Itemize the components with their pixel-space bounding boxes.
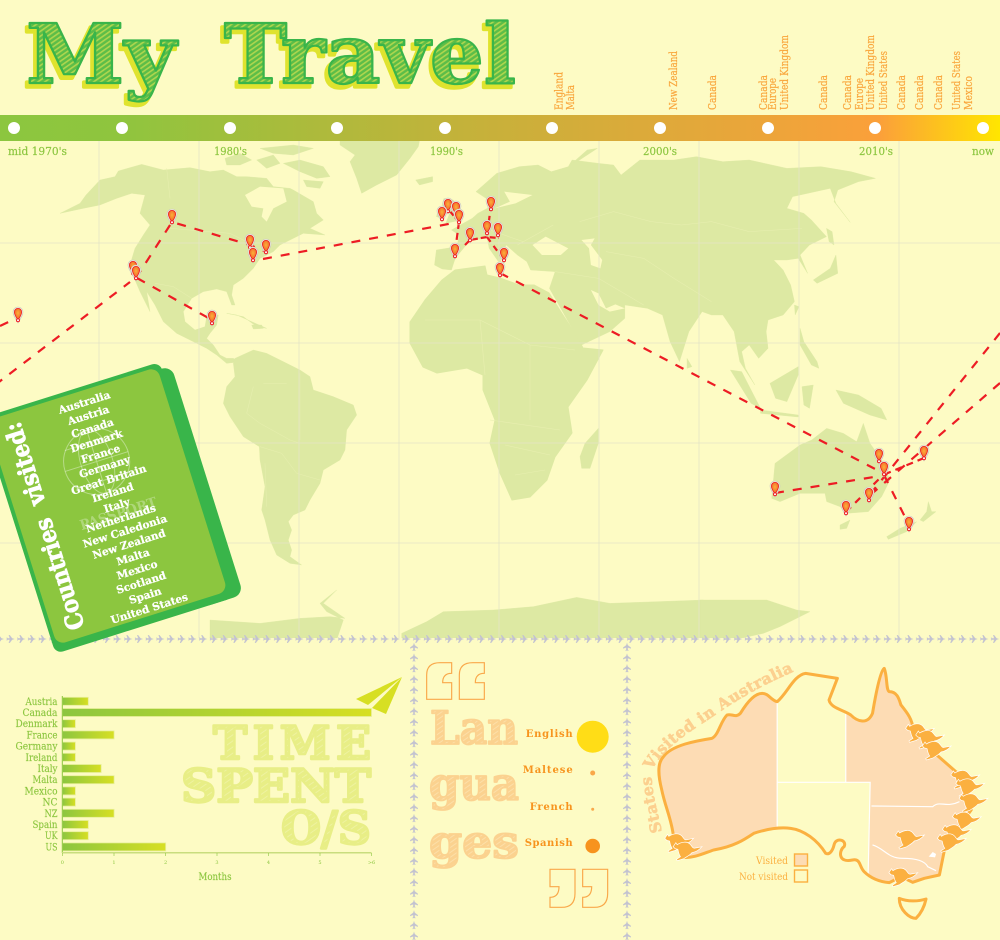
timeline destination labels: Europe xyxy=(766,78,779,110)
countries list xyxy=(41,384,193,628)
bar chart: Austria xyxy=(25,696,57,708)
timeline destination labels: Canada xyxy=(817,75,830,110)
timeline destination labels: Malta xyxy=(564,85,577,110)
countries list: New Zealand xyxy=(91,527,168,562)
opening quote marks xyxy=(427,663,484,699)
timeline destination labels: United States xyxy=(877,51,890,110)
timeline destination labels: Canada xyxy=(913,75,926,110)
language labels: Maltese xyxy=(523,765,573,776)
map pins xyxy=(13,196,929,532)
title: My xyxy=(26,7,179,103)
countries list: Germany xyxy=(78,453,133,481)
countries list: New Caledonia xyxy=(81,513,169,551)
countries list: Malta xyxy=(115,547,151,568)
language labels: French xyxy=(530,802,573,813)
panel: states visited in Australia xyxy=(642,665,989,920)
timeline decade labels: 1980's xyxy=(214,144,247,158)
curved heading: States Visited in Australia xyxy=(642,665,794,833)
bar chart: 3 xyxy=(215,860,219,866)
countries list: United States xyxy=(109,591,189,627)
bar chart: France xyxy=(26,729,58,741)
map: Eurasia xyxy=(416,148,887,420)
bar chart: Ireland xyxy=(26,752,58,764)
heading: time spent o/s: SPENT xyxy=(181,759,371,813)
languages heading: gua xyxy=(429,757,519,811)
Tasmania xyxy=(899,898,926,918)
bar chart: 5 xyxy=(318,860,322,866)
panel: languages xyxy=(427,663,609,907)
bar chart: UK xyxy=(45,830,58,842)
language labels xyxy=(523,729,573,849)
timeline destination labels: United Kingdom xyxy=(864,35,877,110)
countries list: Ireland xyxy=(91,481,136,505)
timeline decade labels: 2000's xyxy=(643,144,677,158)
Australia state map xyxy=(650,663,988,918)
countries list: France xyxy=(80,443,122,466)
timeline decade labels: 2010's xyxy=(859,144,893,158)
map legend: Visited xyxy=(755,856,789,867)
bar chart: 4 xyxy=(267,860,270,866)
plane dividers xyxy=(0,633,1000,940)
timeline decade labels xyxy=(8,144,994,158)
bar chart xyxy=(16,696,375,883)
travel routes xyxy=(0,205,1000,525)
timeline destination labels: Europe xyxy=(853,78,866,110)
bar chart: NC xyxy=(42,797,58,809)
panel: countries visited passport xyxy=(0,359,243,654)
bar chart: 2 xyxy=(164,860,167,866)
timeline decade labels: 1990's xyxy=(430,144,463,158)
map legend: Not visited xyxy=(739,872,789,883)
timeline destination labels: Canada xyxy=(895,75,908,110)
timeline destination labels xyxy=(552,35,975,110)
countries list: Mexico xyxy=(115,558,159,582)
bar chart: Canada xyxy=(22,707,58,719)
bar chart: Germany xyxy=(16,741,58,753)
world map xyxy=(60,138,936,640)
languages heading: Lan xyxy=(430,701,518,755)
bar chart: >6 xyxy=(368,860,375,866)
map: North America and Greenland xyxy=(60,138,420,363)
bar chart: NZ xyxy=(44,808,58,820)
timeline destination labels: England xyxy=(552,72,566,110)
bar chart: 1 xyxy=(112,860,116,866)
map: Africa xyxy=(410,266,603,500)
countries list: Great Britain xyxy=(70,463,148,498)
panel: time spent overseas xyxy=(16,677,402,883)
timeline destination labels: United States xyxy=(950,51,963,110)
bar chart: Months xyxy=(198,871,232,883)
timeline destination labels: New Zealand xyxy=(667,51,680,110)
bar chart: Malta xyxy=(32,774,58,786)
title xyxy=(23,7,516,107)
timeline decade labels: mid 1970's xyxy=(8,144,67,158)
language bubbles xyxy=(577,721,609,853)
closing quote marks xyxy=(550,869,608,907)
bar chart: 0 xyxy=(61,860,64,866)
heading: time spent o/s: TIME xyxy=(213,716,371,770)
bar chart: Mexico xyxy=(24,785,58,797)
bar chart: Italy xyxy=(38,763,58,775)
bar chart: Denmark xyxy=(16,718,58,730)
bar chart: US xyxy=(46,841,58,853)
map: Australia, New Zealand and Antarctica east xyxy=(700,423,936,640)
icon: paper plane xyxy=(356,677,402,714)
countries list: Canada xyxy=(70,416,115,441)
countries list: Spain xyxy=(128,585,163,607)
timeline destination labels: Mexico xyxy=(962,76,975,110)
timeline destination labels: Canada xyxy=(841,75,854,110)
heading: time spent o/s xyxy=(181,716,371,855)
language labels: Spanish xyxy=(525,838,573,849)
passport globe watermark xyxy=(55,420,138,503)
timeline destination labels: Canada xyxy=(757,75,770,110)
countries list: Denmark xyxy=(69,428,125,455)
timeline destination labels: United Kingdom xyxy=(778,35,791,110)
map legend xyxy=(739,854,808,883)
title: Travel xyxy=(224,7,516,103)
countries list: Australia xyxy=(56,389,112,417)
map: Africa borders xyxy=(480,320,574,475)
title: My xyxy=(23,11,176,107)
bar chart: Spain xyxy=(32,819,58,831)
timeline destination labels: Canada xyxy=(932,75,945,110)
heading: time spent o/s: O/S xyxy=(281,801,371,855)
countries list: Scotland xyxy=(115,570,168,597)
languages heading: ges xyxy=(429,815,519,869)
timeline destination labels: Canada xyxy=(706,75,719,110)
timeline bar xyxy=(0,115,1000,141)
countries list: Netherlands xyxy=(85,502,158,536)
map grid xyxy=(0,141,1000,638)
languages heading xyxy=(429,701,519,869)
countries list: Austria xyxy=(65,404,111,428)
kangaroo markers xyxy=(665,724,988,887)
title: Travel xyxy=(221,11,513,107)
countries list: Italy xyxy=(102,496,132,516)
map: South America, Madagascar and Antarctica xyxy=(210,350,703,640)
passport watermark text: PASSPORT xyxy=(78,495,160,534)
timeline decade labels: now xyxy=(972,144,994,158)
language labels: English xyxy=(526,729,573,740)
